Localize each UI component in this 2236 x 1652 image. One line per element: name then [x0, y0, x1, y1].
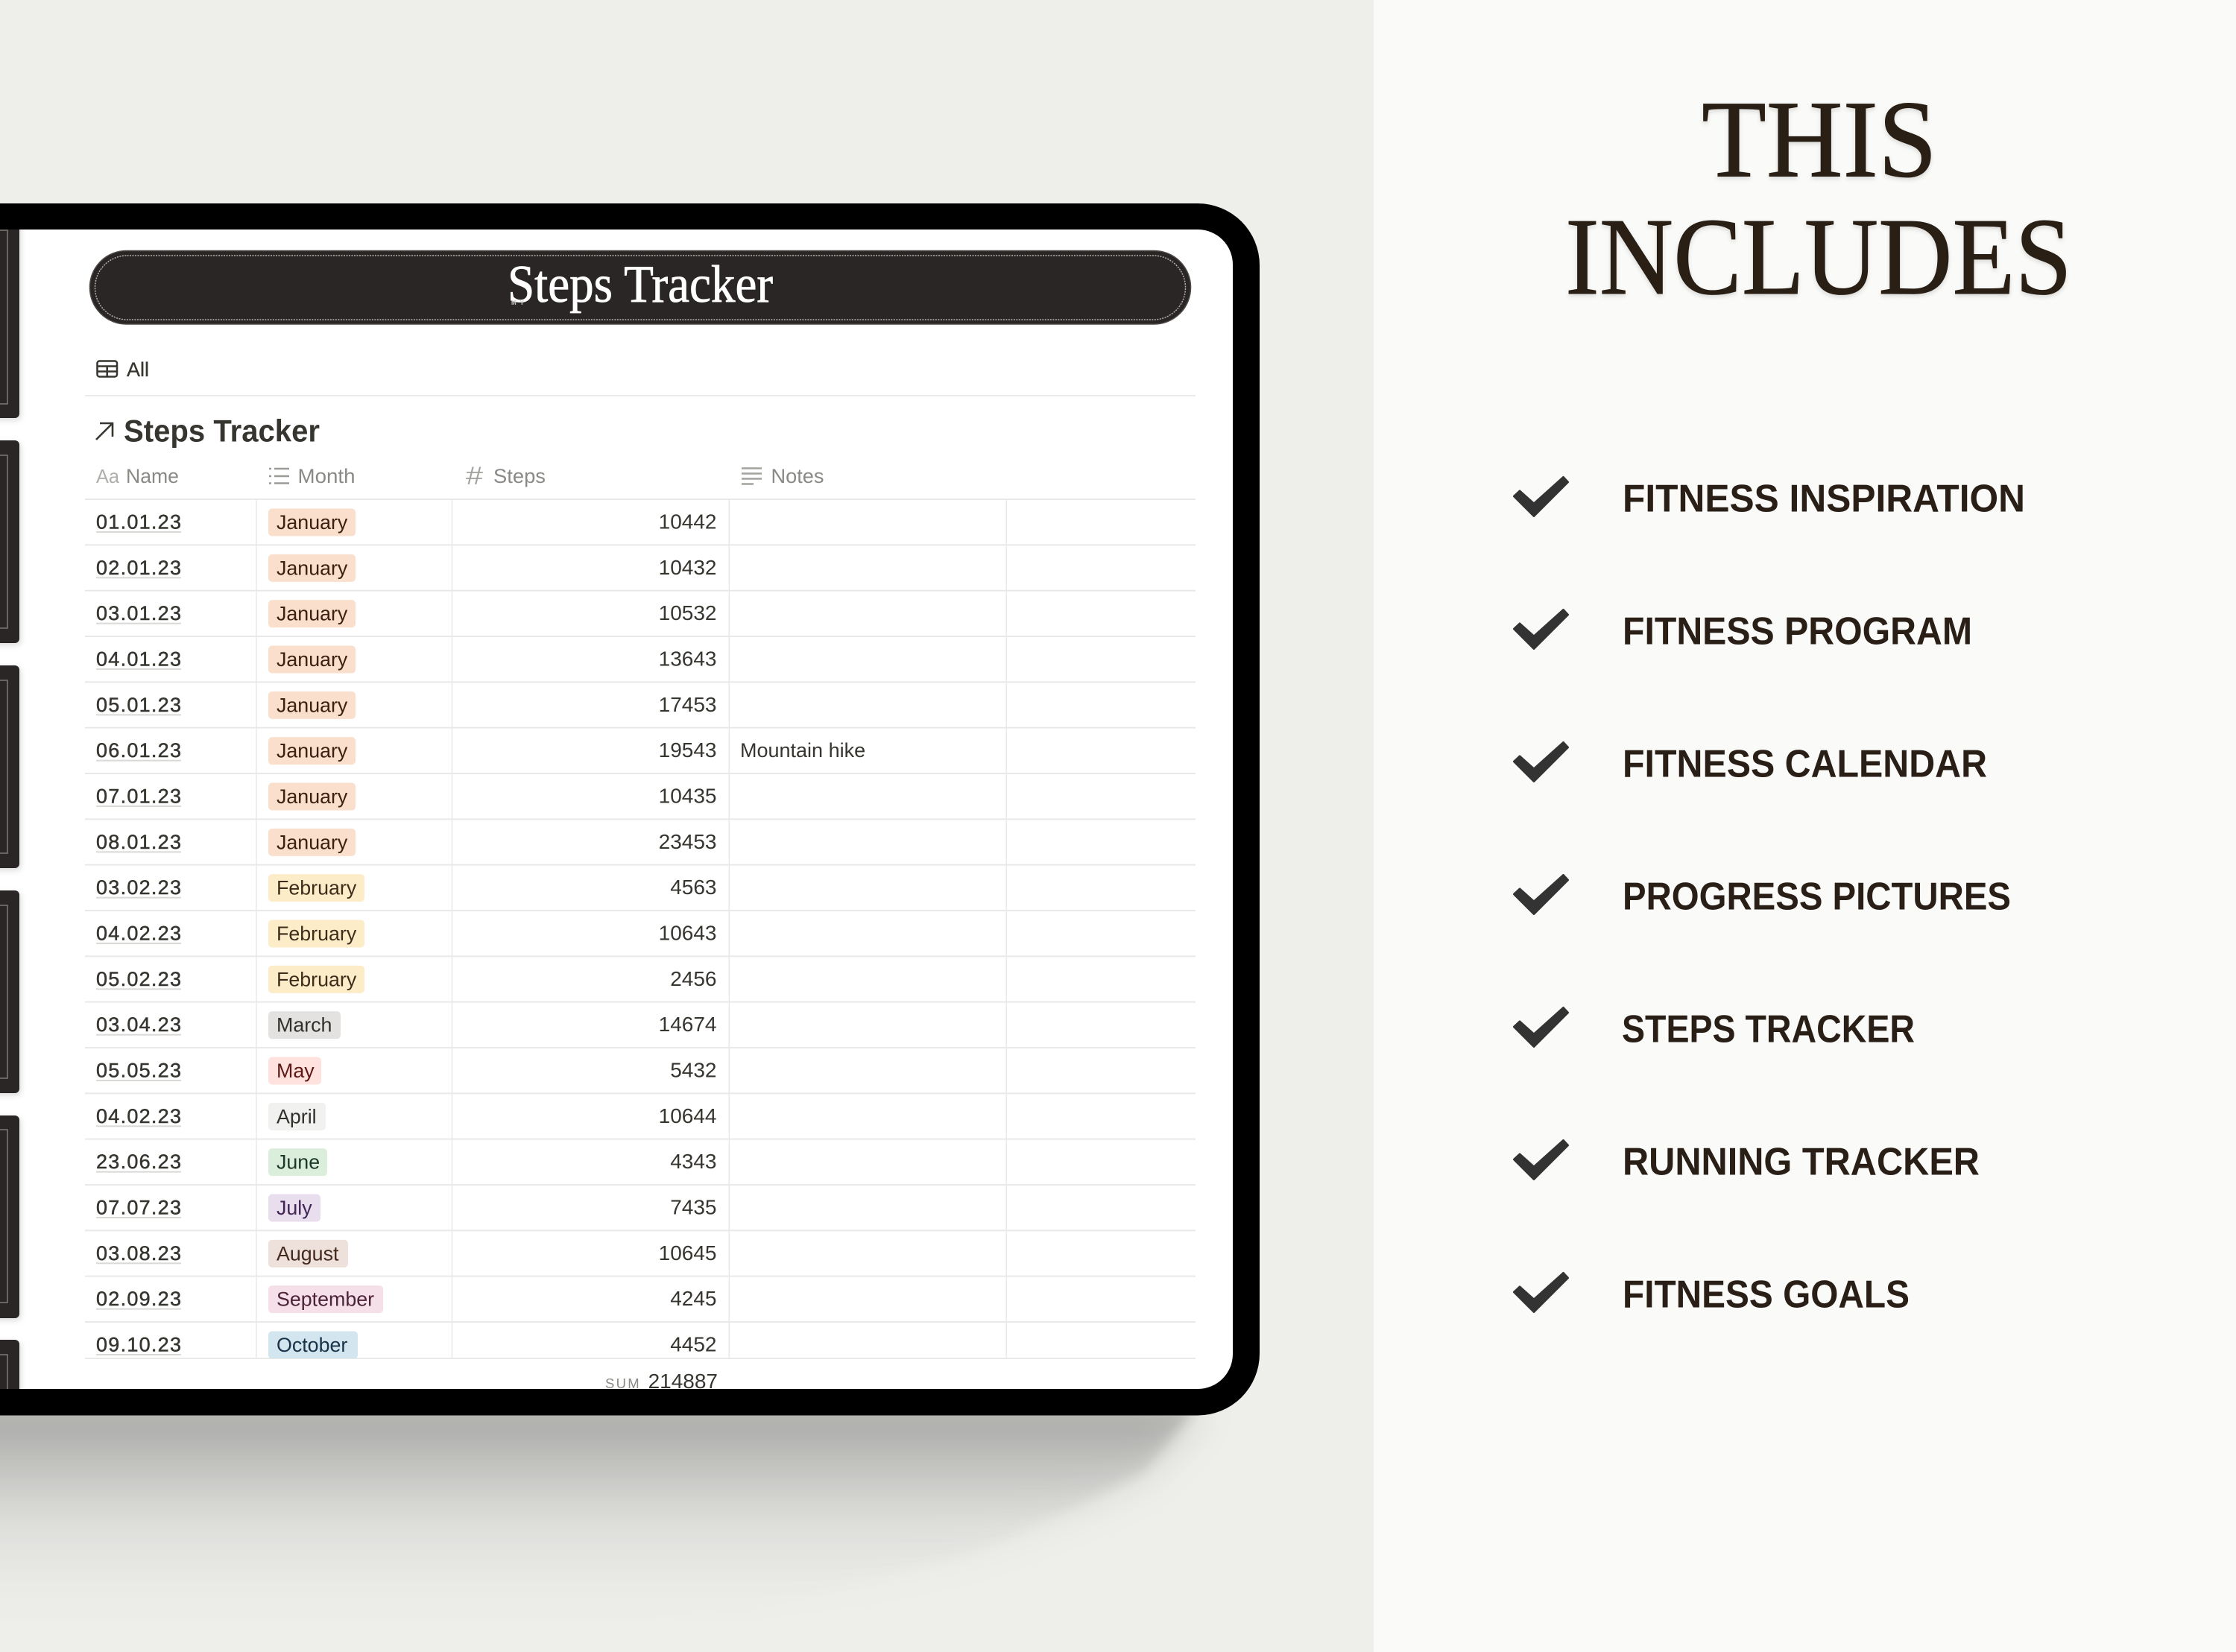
row: 05.02.23	[96, 966, 717, 993]
row: 09.10.23: 09.10.23	[96, 1334, 181, 1356]
row: 05.01.23: 05.01.23	[96, 694, 181, 716]
pill: February	[268, 874, 364, 902]
row: 03.08.23: 03.08.23	[96, 1242, 181, 1265]
row: 03.01.23: 10532	[659, 601, 717, 624]
tablet screen	[0, 230, 1233, 1389]
pill: September	[268, 1285, 383, 1313]
table total: sum: SUM	[605, 1376, 641, 1391]
row: 02.09.23: 02.09.23	[96, 1288, 181, 1310]
column header: Steps: Steps	[493, 465, 546, 487]
pill: April: April	[277, 1105, 317, 1127]
pill: January: January	[277, 831, 348, 853]
icon: check	[1515, 477, 1568, 516]
sidebar cards	[0, 215, 19, 1542]
table total: sum	[605, 1370, 718, 1393]
row: 02.01.23: 02.01.23	[96, 557, 181, 579]
row: 05.05.23: 05.05.23	[96, 1060, 181, 1082]
pill: July	[268, 1194, 320, 1222]
row: 02.01.23: 10432	[659, 556, 717, 579]
item: Running Tracker: RUNNING TRACKER	[1623, 1140, 1980, 1183]
row: 23.06.23: 4343	[670, 1150, 717, 1173]
pill: January	[268, 600, 356, 627]
row: 05.05.23: 5432	[670, 1058, 717, 1082]
icon: check	[1515, 1273, 1568, 1311]
checklist	[1515, 477, 2025, 1316]
column header: Notes: Notes	[771, 465, 824, 487]
row: 07.01.23: 07.01.23	[96, 785, 181, 808]
table header row	[96, 466, 823, 487]
pill: September: September	[277, 1288, 374, 1311]
item: Fitness Inspiration: FITNESS INSPIRATION	[1623, 477, 2025, 520]
pill: February: February	[277, 968, 357, 990]
row: 03.04.23: 14674	[659, 1013, 717, 1036]
pill: February	[268, 966, 364, 993]
row: 04.01.23: 04.01.23	[96, 648, 181, 671]
row: 08.01.23: 08.01.23	[96, 831, 181, 853]
item: Fitness Calendar: FITNESS CALENDAR	[1623, 742, 1987, 785]
pill: January	[268, 692, 356, 719]
column header: Notes	[742, 467, 823, 485]
item: Progress Pictures: PROGRESS PICTURES	[1623, 875, 2011, 918]
item: Fitness Program: FITNESS PROGRAM	[1623, 610, 1972, 653]
pill: February	[268, 920, 364, 948]
table grid	[85, 499, 1196, 1359]
view tab: All: All	[127, 358, 149, 381]
row: 08.01.23: 23453	[659, 830, 717, 853]
pill: January	[268, 508, 356, 537]
row: 07.07.23: 7435	[670, 1195, 717, 1219]
icon: arrow	[96, 423, 113, 440]
row: 03.02.23: 4563	[670, 876, 717, 899]
column header: Steps	[466, 466, 545, 487]
pill: January: January	[277, 785, 348, 808]
pill: January: January	[277, 648, 348, 671]
pill: January: January	[277, 740, 348, 762]
row: 04.02.23: 04.02.23	[96, 922, 181, 945]
row: 04.01.23: 13643	[659, 647, 717, 671]
row: 07.07.23: 07.07.23	[96, 1197, 181, 1219]
heading: THIS INCLUDES: INCLUDES	[1565, 196, 2072, 318]
column header: Steps: #	[466, 462, 483, 490]
row: 03.01.23	[96, 600, 717, 627]
row: 23.06.23	[96, 1148, 717, 1176]
pill: January: January	[277, 694, 348, 716]
pill: May: May	[277, 1060, 315, 1082]
row: 01.01.23: 01.01.23	[96, 511, 181, 534]
device shadow	[0, 1408, 1204, 1652]
heading: THIS INCLUDES	[1565, 79, 2072, 318]
note: Mountain hike: Mountain hike	[740, 739, 865, 762]
row: 04.02.23: 10643	[659, 921, 717, 945]
pill: July: July	[277, 1197, 312, 1219]
right panel background	[1374, 0, 2236, 1652]
banner title text: Steps Tracker	[508, 256, 773, 314]
column header: Name	[96, 469, 178, 483]
row: 04.02.23 (April): 04.02.23	[96, 1105, 181, 1127]
row: 03.01.23: 03.01.23	[96, 602, 181, 624]
row: 03.08.23	[96, 1240, 717, 1268]
pill: May	[268, 1057, 321, 1085]
item: Fitness Goals	[1515, 1273, 1910, 1316]
row: 03.02.23	[96, 874, 717, 902]
row: 07.07.23	[96, 1194, 717, 1222]
row: 03.04.23	[96, 1011, 717, 1039]
item: Steps Tracker: STEPS TRACKER	[1622, 1007, 1915, 1051]
row: 05.05.23	[96, 1057, 717, 1085]
row: 05.01.23	[96, 692, 717, 719]
pill: April	[268, 1103, 326, 1130]
row: 06.01.23: 19543	[659, 738, 717, 762]
row: 06.01.23	[96, 737, 865, 765]
banner small label: MY	[511, 300, 528, 306]
tablet device frame	[0, 203, 1260, 1416]
row: 01.01.23: 10442	[659, 510, 717, 534]
view tab: All	[96, 360, 148, 378]
icon: check	[1515, 1007, 1568, 1046]
row: 05.02.23: 2456	[670, 967, 717, 990]
row: 04.02.23 (April)	[96, 1103, 717, 1130]
row: 02.09.23	[96, 1285, 717, 1313]
pill: January	[268, 645, 356, 674]
pill: March	[268, 1011, 341, 1039]
pill: June	[268, 1148, 327, 1176]
row: 05.02.23: 05.02.23	[96, 968, 181, 990]
pill: October	[268, 1331, 358, 1359]
pill: February: February	[277, 877, 357, 899]
row: 06.01.23: 06.01.23	[96, 739, 181, 762]
row: 03.04.23: 03.04.23	[96, 1013, 181, 1036]
row: 09.10.23	[96, 1331, 717, 1359]
pill: January: January	[277, 557, 348, 579]
column header: Month: Month	[298, 465, 355, 487]
icon: check	[1515, 610, 1568, 648]
pill: February: February	[277, 922, 357, 945]
pill: March: March	[277, 1014, 332, 1037]
heading: THIS INCLUDES: THIS	[1702, 79, 1937, 201]
pill: January: January	[277, 603, 348, 625]
row: 23.06.23: 23.06.23	[96, 1151, 181, 1173]
icon: check	[1515, 875, 1568, 914]
pill: January: January	[277, 511, 348, 534]
pill: October: October	[277, 1334, 347, 1356]
banner: Steps Tracker title	[89, 250, 1191, 324]
row: 01.01.23	[96, 508, 717, 537]
row: 04.02.23	[96, 920, 717, 948]
row: 04.02.23 (April): 10644	[659, 1104, 717, 1127]
column header: Name: Name	[126, 465, 179, 487]
pill: June: June	[277, 1151, 320, 1174]
row: 05.01.23: 17453	[659, 693, 717, 716]
column header: Name: Aa	[96, 465, 120, 487]
icon: table	[97, 361, 117, 377]
row: 07.01.23	[96, 782, 717, 811]
row: 02.01.23	[96, 554, 717, 582]
pill: January	[268, 829, 356, 856]
row: 08.01.23	[96, 829, 717, 856]
pill: January	[268, 737, 356, 765]
row: 02.09.23: 4245	[670, 1287, 717, 1310]
icon: check	[1515, 1140, 1568, 1179]
row: 09.10.23: 4452	[670, 1332, 717, 1356]
left background	[0, 0, 1374, 1652]
row: 03.08.23: 10645	[659, 1241, 717, 1265]
pill: August	[268, 1240, 348, 1268]
pill: January	[268, 782, 356, 811]
icon: check	[1515, 742, 1568, 781]
item: Steps Tracker	[1515, 1007, 1915, 1051]
row: 03.02.23: 03.02.23	[96, 876, 181, 899]
column header: Month	[269, 468, 354, 484]
row: 07.01.23: 10435	[659, 784, 717, 808]
pill: August: August	[277, 1242, 339, 1265]
table heading: Steps Tracker	[124, 413, 320, 449]
table total: sum: 214887	[648, 1370, 718, 1393]
row: 04.01.23	[96, 645, 717, 674]
pill: January	[268, 554, 356, 582]
item: Fitness Goals: FITNESS GOALS	[1623, 1273, 1910, 1316]
